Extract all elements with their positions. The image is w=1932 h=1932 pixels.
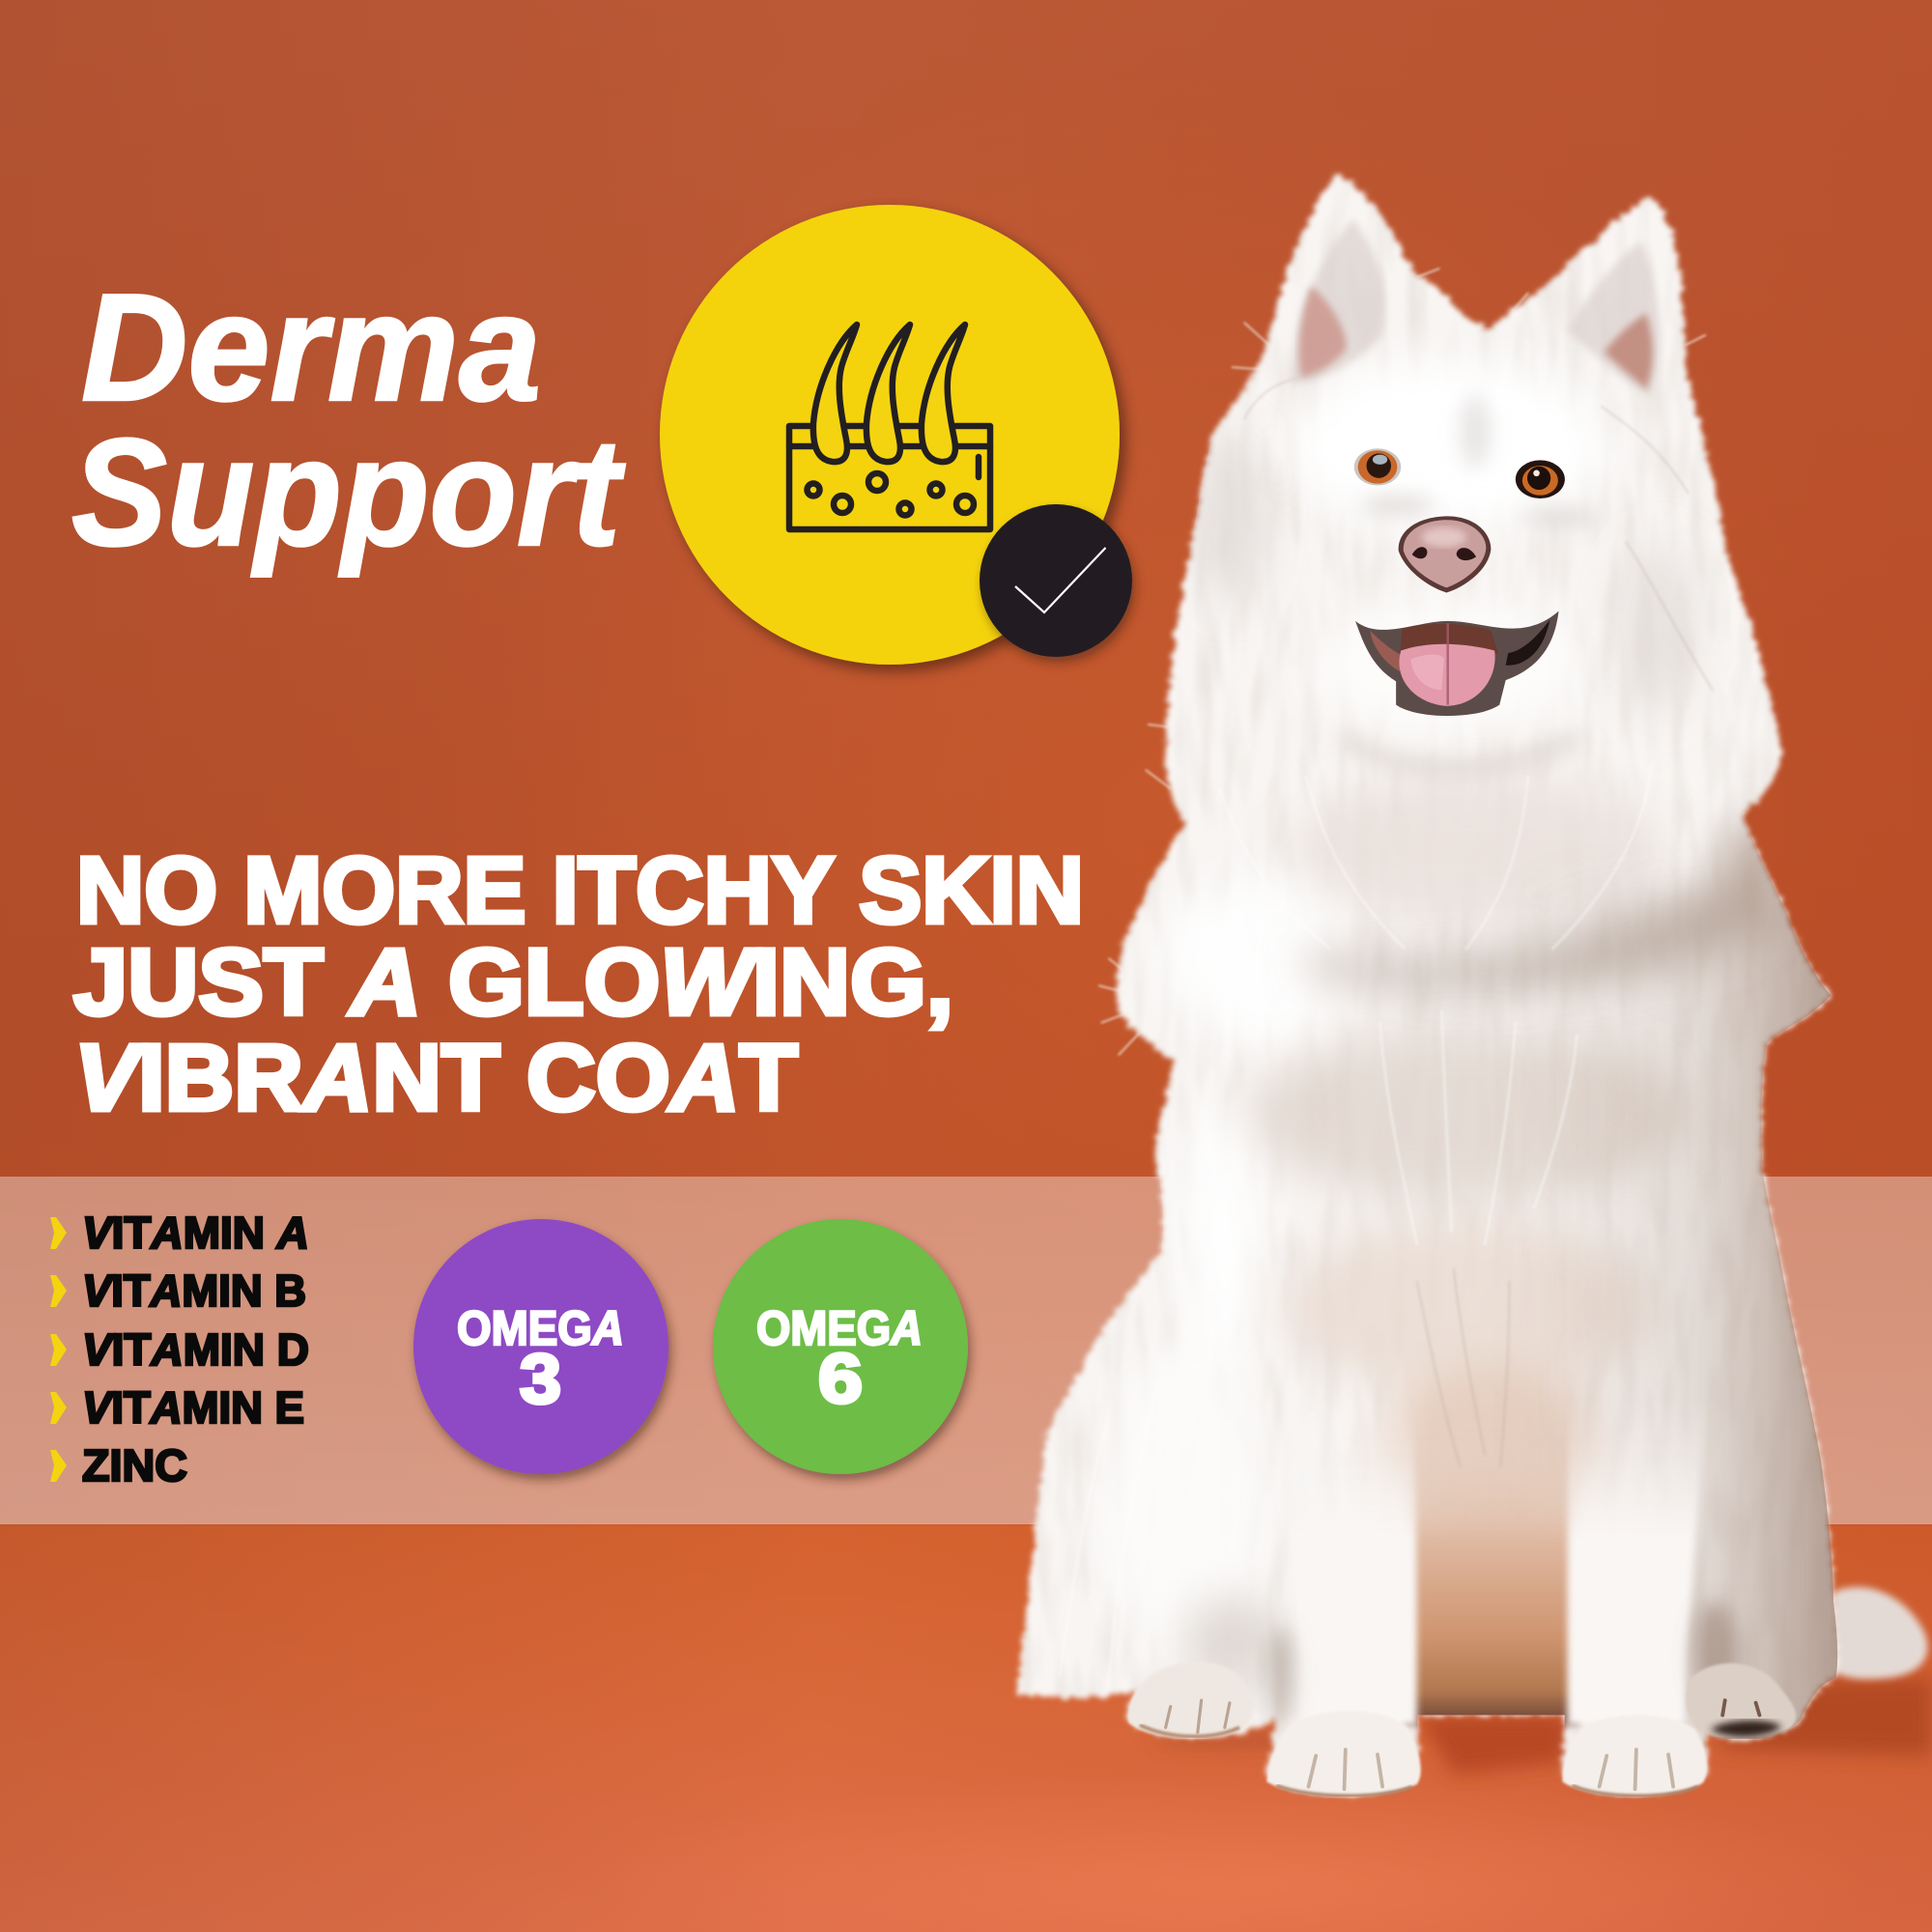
mouth — [1355, 611, 1559, 716]
title: Derma Support: Derma — [81, 263, 541, 433]
omega 3 badge — [413, 1219, 668, 1474]
floor shadow under dog — [1152, 1678, 1932, 1775]
right side body shade — [1563, 873, 1837, 1758]
translucent ingredient band — [0, 1177, 1932, 1524]
omega 6 badge — [713, 1219, 968, 1474]
right front paw — [1562, 1716, 1707, 1797]
right eye — [1516, 460, 1565, 498]
check badge — [980, 504, 1132, 657]
dog photo illustration — [1012, 170, 1932, 1926]
body shading — [1023, 222, 1837, 1758]
neck crease — [1306, 817, 1790, 991]
headline — [73, 838, 1084, 1130]
icon badge: yellow circle with skin and hair icon — [660, 205, 1120, 665]
left eye — [1354, 448, 1401, 486]
left front paw — [1266, 1711, 1420, 1797]
bullet chevrons — [50, 1217, 67, 1482]
headline: JUST A GLOWING, — [73, 929, 953, 1035]
nose — [1399, 516, 1491, 593]
chest shadow between front legs — [1403, 1486, 1582, 1731]
headline: NO MORE ITCHY SKIN — [76, 838, 1084, 943]
fur strands — [1060, 269, 1713, 1682]
omega 6 badge: 6 — [818, 1341, 863, 1418]
title: Derma Support — [71, 263, 626, 578]
hind leg shade — [1269, 1602, 1737, 1725]
bright face — [1288, 357, 1608, 733]
left ear inner — [1292, 219, 1385, 384]
right hind paw — [1686, 1663, 1796, 1738]
headline: VIBRANT COAT — [74, 1025, 798, 1130]
brow and muzzle shade — [1337, 394, 1596, 778]
left hind paw — [1128, 1662, 1253, 1739]
icon: skin layers — [789, 325, 990, 529]
ingredient list: ZINC — [82, 1440, 187, 1491]
tail — [1831, 1587, 1927, 1679]
right ear inner — [1567, 242, 1660, 397]
ingredient list: VITAMIN B — [82, 1265, 306, 1316]
title: Derma Support: Support — [71, 408, 626, 578]
ingredient list: VITAMIN D — [82, 1324, 309, 1375]
floor light patch — [591, 1775, 1873, 1932]
fur grain texture — [1023, 222, 1774, 1752]
ingredient list: VITAMIN E — [82, 1382, 304, 1433]
omega 6 badge: OMEGA — [756, 1301, 923, 1355]
omega 3 badge: 3 — [520, 1341, 561, 1418]
omega 3 badge: OMEGA — [457, 1301, 624, 1355]
dog silhouette — [1016, 175, 1837, 1795]
front legs — [1293, 1428, 1423, 1728]
ingredient list: VITAMIN A — [82, 1208, 309, 1258]
ingredient list — [50, 1208, 309, 1491]
